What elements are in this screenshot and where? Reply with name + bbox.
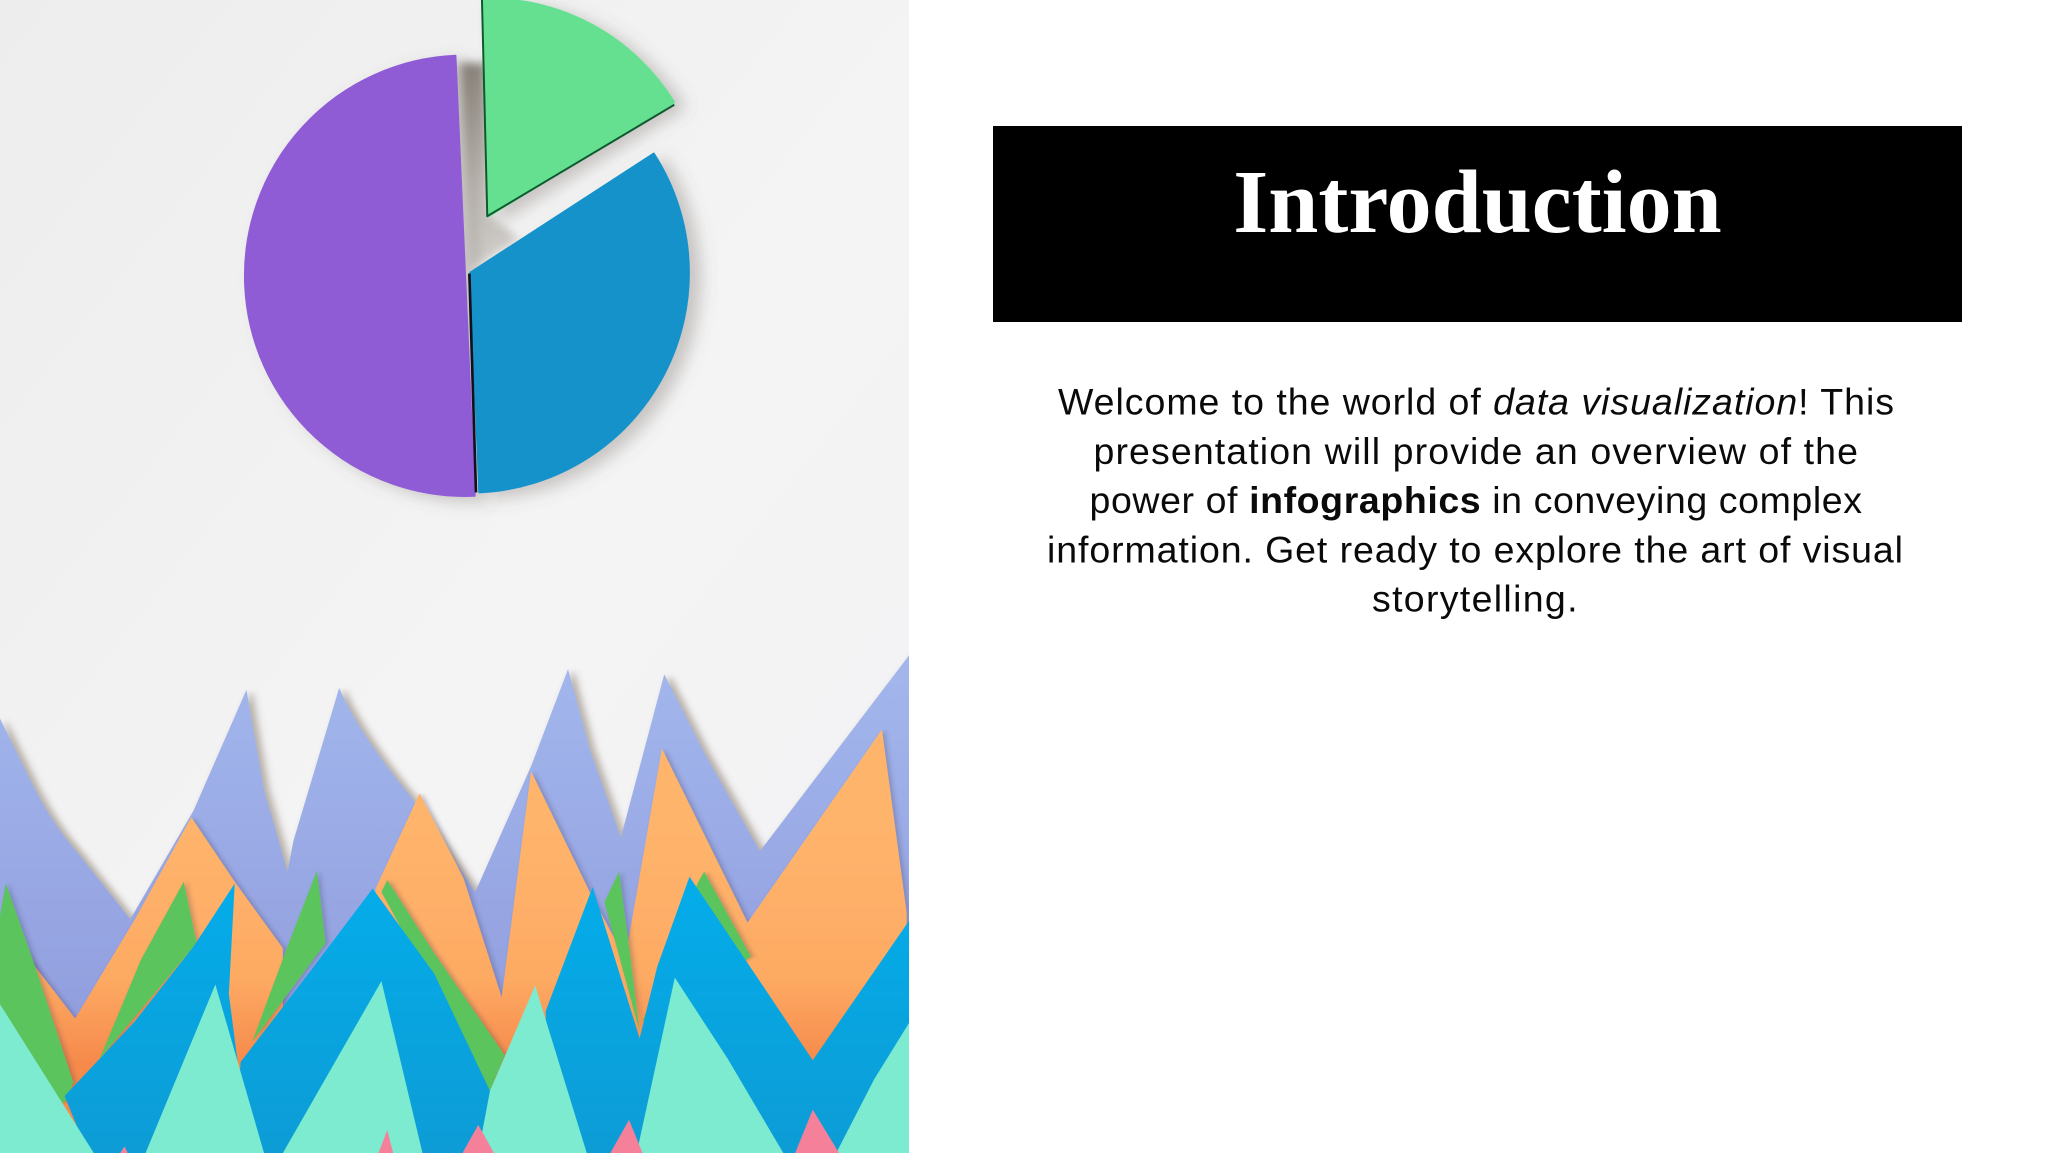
orange layer bbox=[0, 729, 907, 1153]
pie slice: green wedge bbox=[483, 0, 674, 216]
pie slice: blue third bbox=[470, 154, 689, 492]
intro body text: Welcome to the world of data visualization! This bbox=[1058, 380, 1894, 422]
green layer bbox=[0, 871, 751, 1103]
pink layer bbox=[120, 1110, 839, 1153]
title banner bbox=[993, 126, 1962, 322]
photo panel: paper pie chart and paper mountains bbox=[0, 0, 909, 1153]
intro body text: storytelling. bbox=[1372, 578, 1578, 620]
intro body text bbox=[1047, 380, 1903, 620]
mint layer bbox=[0, 978, 910, 1153]
periwinkle layer bbox=[0, 654, 910, 1153]
paper pie chart bbox=[245, 0, 689, 496]
title banner: Introduction bbox=[1233, 153, 1722, 252]
pie slice: purple half bbox=[245, 56, 475, 496]
intro body text: power of infographics in conveying complex bbox=[1090, 479, 1862, 521]
blue layer bbox=[65, 877, 910, 1153]
intro body text: presentation will provide an overview of the bbox=[1094, 430, 1858, 472]
intro body text: information. Get ready to explore the art of visual bbox=[1047, 528, 1903, 570]
paper mountain layers bbox=[0, 654, 910, 1153]
